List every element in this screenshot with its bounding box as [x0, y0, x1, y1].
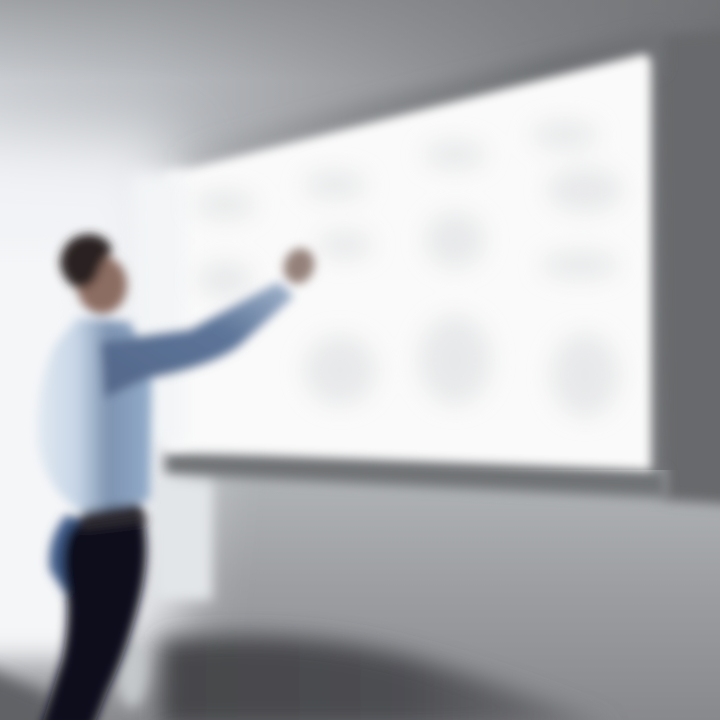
- white reflection by leg: [118, 643, 146, 707]
- man: [37, 234, 319, 720]
- board top frame: [170, 28, 662, 180]
- floor shadow: [160, 636, 610, 720]
- board lit surface: [165, 54, 651, 470]
- neck and face: [77, 256, 127, 314]
- upper wall: [0, 0, 720, 500]
- lit panel below board: [155, 482, 212, 600]
- belt: [80, 503, 148, 530]
- lower wall: [0, 470, 720, 720]
- floor lower left corner: [0, 665, 50, 720]
- column 4 smudges: [531, 121, 623, 417]
- trousers: [40, 512, 147, 720]
- left wall core highlight: [0, 250, 80, 650]
- board blurred content columns: [193, 121, 623, 417]
- board bottom frame: [165, 452, 668, 498]
- hand: [279, 244, 319, 288]
- trousers highlight: [49, 515, 90, 595]
- column 1 smudges: [193, 191, 257, 298]
- column 2 smudges: [303, 171, 376, 405]
- torso: [37, 318, 152, 512]
- left bright wall glow: [0, 130, 190, 660]
- right side dark wall strip: [660, 30, 720, 505]
- ceiling shade band: [0, 0, 720, 80]
- column 3 smudges: [419, 141, 491, 405]
- board left edge blend: [130, 170, 185, 445]
- raised arm: [100, 282, 294, 398]
- hair: [60, 234, 112, 288]
